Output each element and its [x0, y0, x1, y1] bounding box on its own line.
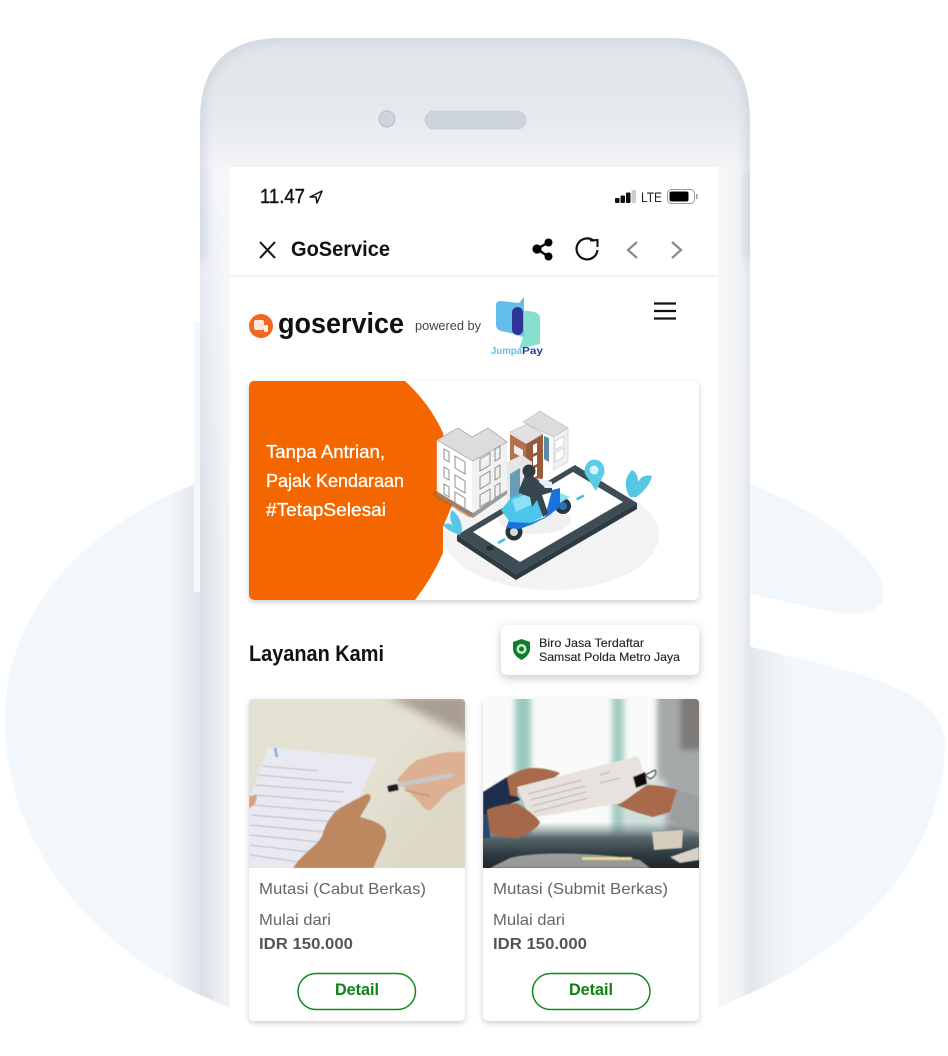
- icon: shield: [513, 639, 530, 660]
- JumpaPay logo: Jumpa: [491, 345, 522, 357]
- icon: back: [628, 242, 637, 258]
- price: IDR 150.000: [493, 936, 587, 953]
- banner headline: Tanpa Antrian,: [266, 442, 385, 462]
- clock: 11.47: [260, 186, 305, 208]
- status bar: [260, 186, 698, 208]
- nav title: GoService: [291, 238, 390, 261]
- right leaf: [626, 470, 652, 497]
- service card: cabut berkas: [249, 695, 470, 1021]
- price: IDR 150.000: [259, 936, 353, 953]
- phone body: [194, 38, 750, 1023]
- pin: [584, 460, 604, 491]
- JumpaPay logo: Pay: [522, 345, 543, 357]
- front building: [430, 428, 507, 518]
- powered by: powered by: [415, 319, 482, 333]
- LTE label: LTE: [641, 189, 662, 205]
- photo: handing over a pen: [249, 695, 470, 868]
- icon: battery: [668, 190, 698, 204]
- banner illustration: [249, 381, 659, 600]
- small annex: [507, 456, 532, 502]
- service card: submit berkas: [483, 690, 707, 1021]
- price label: Mulai dari: [259, 912, 331, 929]
- icon: close: [260, 242, 275, 258]
- detail button: [298, 974, 416, 1010]
- phone map: [457, 465, 637, 580]
- badge text: [539, 636, 680, 664]
- brick building: [510, 424, 543, 482]
- scooter and rider: [499, 464, 571, 540]
- site header: [249, 297, 676, 357]
- banner headline: [266, 442, 404, 520]
- orange shape: [249, 381, 453, 600]
- card title: Mutasi (Submit Berkas): [493, 881, 668, 898]
- icon: hamburger: [654, 304, 676, 318]
- price label: Mulai dari: [493, 912, 565, 929]
- detail button: Detail: [569, 981, 613, 999]
- registered badge: [501, 625, 699, 675]
- icon: forward: [672, 242, 681, 258]
- section heading: Layanan Kami: [249, 641, 384, 666]
- badge text: Samsat Polda Metro Jaya: [539, 650, 680, 664]
- icon: refresh: [577, 238, 598, 259]
- badge text: Biro Jasa Terdaftar: [539, 636, 644, 650]
- banner headline: Pajak Kendaraan: [266, 471, 404, 491]
- photo: handing over a document: [483, 690, 707, 868]
- JumpaPay logo: [491, 297, 543, 357]
- screen: [230, 167, 718, 1023]
- icon: signal: [615, 190, 636, 203]
- banner headline: #TetapSelesai: [266, 500, 386, 520]
- detail button: Detail: [335, 981, 379, 999]
- background blob: [5, 480, 945, 1010]
- browser nav bar: [230, 238, 718, 276]
- icon: location arrow: [310, 191, 322, 203]
- banner: [249, 381, 699, 600]
- speaker: [425, 111, 526, 129]
- back building: [523, 411, 568, 470]
- goservice logo: goservice: [278, 308, 404, 340]
- detail button: [532, 974, 650, 1010]
- icon: share: [532, 238, 552, 260]
- card title: Mutasi (Cabut Berkas): [259, 881, 426, 898]
- camera: [379, 111, 395, 127]
- ground ellipse: [443, 480, 659, 590]
- left leaf: [443, 510, 462, 535]
